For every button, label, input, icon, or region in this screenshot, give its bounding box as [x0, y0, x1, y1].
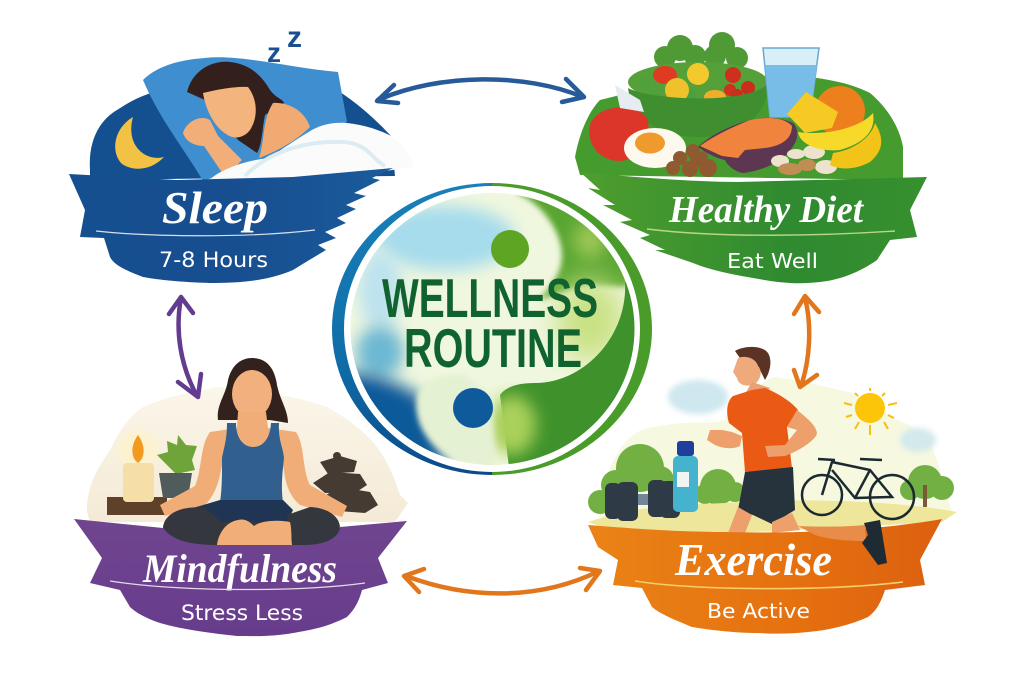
- healthy diet heading: Healthy Diet: [668, 189, 864, 231]
- icon: stones: [313, 452, 378, 513]
- icon: water glass: [763, 48, 819, 117]
- icon: nuts: [666, 144, 844, 177]
- diet grass background: [575, 78, 903, 180]
- arrow: exercise to mindfulness: [404, 568, 600, 593]
- sleep ribbon: [69, 168, 393, 283]
- icon: water bottle: [673, 441, 698, 512]
- icon: zzz: z: [287, 21, 302, 54]
- green dot: [491, 230, 529, 268]
- trees: [588, 444, 954, 514]
- icon: zzz: z: [267, 37, 281, 68]
- icon: apple: [589, 85, 649, 161]
- icon: sun: [844, 388, 897, 435]
- exercise subtitle: Be Active: [707, 599, 810, 623]
- blue dot: [453, 388, 493, 428]
- candle glow: [118, 430, 158, 470]
- cloud: [668, 380, 728, 414]
- arrow: sleep to diet: [377, 79, 584, 103]
- central emblem: [332, 183, 652, 475]
- watercolor yin yang disc: [350, 193, 634, 465]
- icon: candle: [107, 435, 167, 515]
- center title: [382, 267, 598, 379]
- center title: ROUTINE: [404, 317, 582, 379]
- center title: WELLNESS: [382, 267, 598, 329]
- icon: zzz: [267, 21, 302, 68]
- outer ring: green half: [492, 183, 652, 475]
- crossed legs over ribbon top: [163, 522, 340, 545]
- panel: sleep: [69, 21, 414, 283]
- icon: sleeping woman: [183, 62, 310, 177]
- diet ribbon: [580, 172, 927, 283]
- runner trailing leg and shoe: [798, 520, 887, 565]
- icon: food bowl: [628, 62, 768, 137]
- exercise ribbon: [588, 519, 942, 634]
- icon: salmon: [698, 118, 797, 173]
- icon: plant: [157, 435, 197, 498]
- exercise heading: Exercise: [674, 535, 832, 585]
- outer ring: blue half: [332, 183, 492, 475]
- icon: meditating woman: [160, 358, 347, 545]
- arrow: mindfulness to sleep: [169, 297, 201, 397]
- white gap: [344, 186, 640, 472]
- mindfulness backdrop: [87, 387, 408, 522]
- sleep heading: Sleep: [162, 182, 268, 233]
- mindfulness ribbon: [74, 519, 407, 636]
- icon: dumbbell: [605, 480, 680, 521]
- pillow: [143, 57, 347, 181]
- mindfulness subtitle: Stress Less: [181, 601, 303, 625]
- sleep subtitle: 7-8 Hours: [159, 248, 268, 272]
- mindfulness heading: Mindfulness: [142, 546, 337, 591]
- panel: healthy diet: [575, 32, 927, 283]
- icon: bicycle: [802, 459, 914, 519]
- exercise backdrop: [600, 377, 952, 522]
- feet: [217, 519, 292, 545]
- blanket: [208, 123, 414, 181]
- icon: lettuce leaves: [654, 32, 748, 69]
- panel: mindfulness: [74, 358, 408, 636]
- icon: orange, lemon and bananas: [787, 86, 881, 168]
- icon: runner: [707, 347, 817, 533]
- arrow: diet to exercise: [794, 296, 819, 387]
- second cloud: [900, 428, 936, 452]
- ground: [588, 500, 957, 534]
- healthy diet subtitle: Eat Well: [727, 249, 818, 273]
- icon: egg: [624, 128, 686, 168]
- icon: crescent moon: [115, 117, 164, 169]
- panel: exercise: [588, 347, 957, 634]
- sleep night background: [90, 88, 395, 180]
